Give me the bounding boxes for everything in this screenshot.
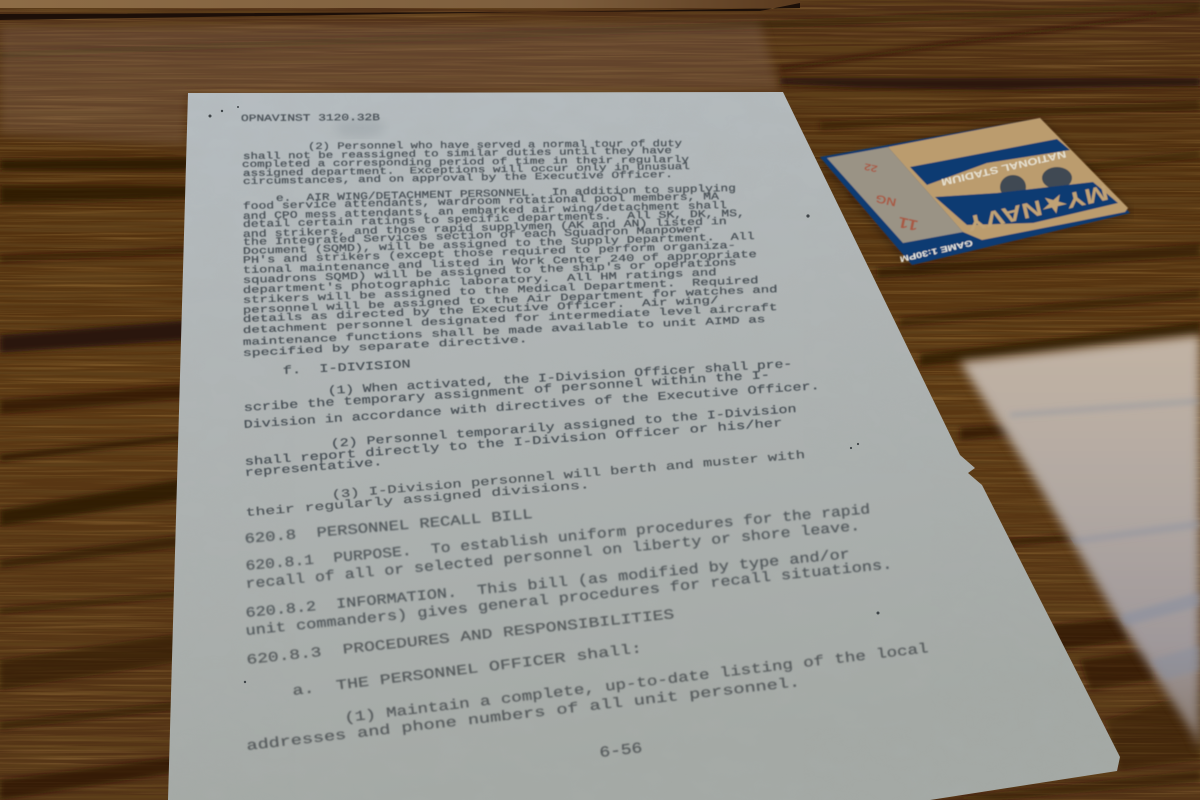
section: I-Division [243, 358, 820, 520]
paragraph: personnel tour of duty [242, 138, 690, 187]
section: I-Division: their regularly assigned divisions. [245, 479, 590, 520]
paragraph: personnel tour of duty: circumstances, and on approval by the Executive Officer. [243, 169, 673, 187]
paragraph: air wing and detachment personnel: squadrons SQMD) will be assigned to the ship's or operations [243, 257, 737, 287]
section: personnel recall bill: 620.8.1 PURPOSE. To establish uniform procedures for the rapid [245, 502, 871, 575]
stub printing: GAME 1:30PM [899, 238, 974, 263]
paragraph: air wing and detachment personnel: e. AIR WING/DETACHMENT PERSONNEL. In addition to supplying [276, 183, 736, 205]
glare on table top [0, 22, 780, 146]
paragraph: air wing and detachment personnel: specified by separate directive. [243, 334, 528, 360]
section: personnel recall bill: a. THE PERSONNEL OFFICER shall: [292, 641, 643, 700]
section: I-Division: Division in accordance with directives of the Executive Officer. [243, 380, 820, 432]
paragraph: air wing and detachment personnel: maintenance functions shall be made available to unit AIMD as [243, 314, 766, 349]
paragraph: personnel tour of duty: (2) Personnel who have served a normal tour of duty [308, 138, 682, 152]
stub printing: 22 [863, 161, 879, 174]
section: I-Division: shall report directly to the I-Division Officer or his/her [244, 417, 783, 469]
paragraph: personnel tour of duty: completed a corresponding period of time in their regularly [242, 154, 689, 170]
paragraph: air wing and detachment personnel: Document (SQMD), will be assigned to the Supply Department. All [243, 231, 755, 258]
window light reflection on table [960, 335, 1200, 750]
paragraph: air wing and detachment personnel: and strikers, and those rapid supplymen (AK and AN) listed in [243, 216, 727, 241]
paragraph: air wing and detachment personnel: the Integrated Services section of each Squadron Manpower [243, 224, 701, 249]
paragraph: air wing and detachment personnel: detail certain ratings to specific departments. All SK, DK, MS, [243, 208, 745, 231]
paragraph: air wing and detachment personnel: and CPO mess attendants, an embarked air wing/detachment shall [243, 200, 727, 223]
paragraph: personnel tour of duty: shall not be reassigned to similar duties until they have [243, 145, 672, 162]
stub printing: NG [874, 192, 898, 209]
paragraph: air wing and detachment personnel: details as directed by the Executive Officer. Air wing/ [243, 295, 719, 326]
section: I-Division: (3) I-Division personnel will berth and muster with [331, 449, 806, 502]
main gold panel [888, 118, 1128, 240]
page number: 6-56 [599, 740, 643, 762]
paragraph: personnel tour of duty: assigned department. Exceptions will occur only in unusual [243, 161, 690, 179]
section: personnel recall bill [244, 502, 929, 755]
paragraph: air wing and detachment personnel [243, 183, 778, 360]
paragraph: air wing and detachment personnel: personnel will be assigned to the Air Department for watches and [243, 284, 778, 317]
page header: OPNAVINST 3120.32B [241, 112, 380, 124]
ticket base [820, 118, 1130, 265]
crest icons [1000, 167, 1072, 199]
section: I-Division: representative. [244, 456, 383, 480]
Army Navy banner: MY★NAVY [964, 180, 1111, 236]
section: I-Division: scribe the temporary assignment of personnel within the I- [243, 369, 770, 415]
stub printing [863, 161, 974, 263]
section: personnel recall bill: 620.8.2 INFORMATION. This bill (as modified by type and/or [245, 547, 851, 622]
section: personnel recall bill: 620.8.3 PROCEDURES AND RESPONSIBILITIES [246, 607, 675, 669]
paragraph: air wing and detachment personnel: tional maintenance and listed in Work Center 240 of appropriate [243, 249, 757, 277]
section: personnel recall bill: unit commanders) gives general procedures for recall situations. [245, 557, 893, 640]
stadium band: NATIONAL STADIUM [940, 148, 1067, 187]
stub panel [827, 147, 963, 243]
ticket shadow [820, 120, 1132, 268]
section: I-Division: (2) Personnel temporarily assigned to the I-Division [330, 403, 797, 451]
paper specks [208, 106, 880, 683]
stub printing: 11 [896, 213, 920, 235]
ticket: Army-Navy game stub [820, 118, 1132, 268]
section: personnel recall bill: 620.8 PERSONNEL RECALL BILL [244, 507, 533, 548]
paragraph: air wing and detachment personnel: detachment personnel designated for intermediate level aircraft [243, 302, 778, 337]
section: I-Division: f. I-DIVISION [283, 358, 411, 378]
paragraph: air wing and detachment personnel: strikers will be assigned to the Medical Department. Required [243, 275, 759, 307]
section: I-Division: (1) When activated, the I-Division Officer shall pre- [327, 358, 792, 398]
section: personnel recall bill: addresses and phone numbers of all unit personnel. [246, 675, 801, 755]
section: personnel recall bill: recall of all or selected personnel on liberty or shore leave. [245, 519, 861, 593]
paragraph: air wing and detachment personnel: PH's and strikers (except those required to perform organiza- [243, 240, 736, 267]
section: personnel recall bill: (1) Maintain a complete, up-to-date listing of the local [344, 641, 929, 727]
paper sheet [160, 90, 1130, 800]
paragraph: air wing and detachment personnel: department's photographic laboratory. All HM ratings and [243, 267, 717, 297]
stadium band [910, 139, 1070, 187]
paragraph: air wing and detachment personnel: food service attendants, wardroom rotational pool members, MA [243, 191, 719, 213]
